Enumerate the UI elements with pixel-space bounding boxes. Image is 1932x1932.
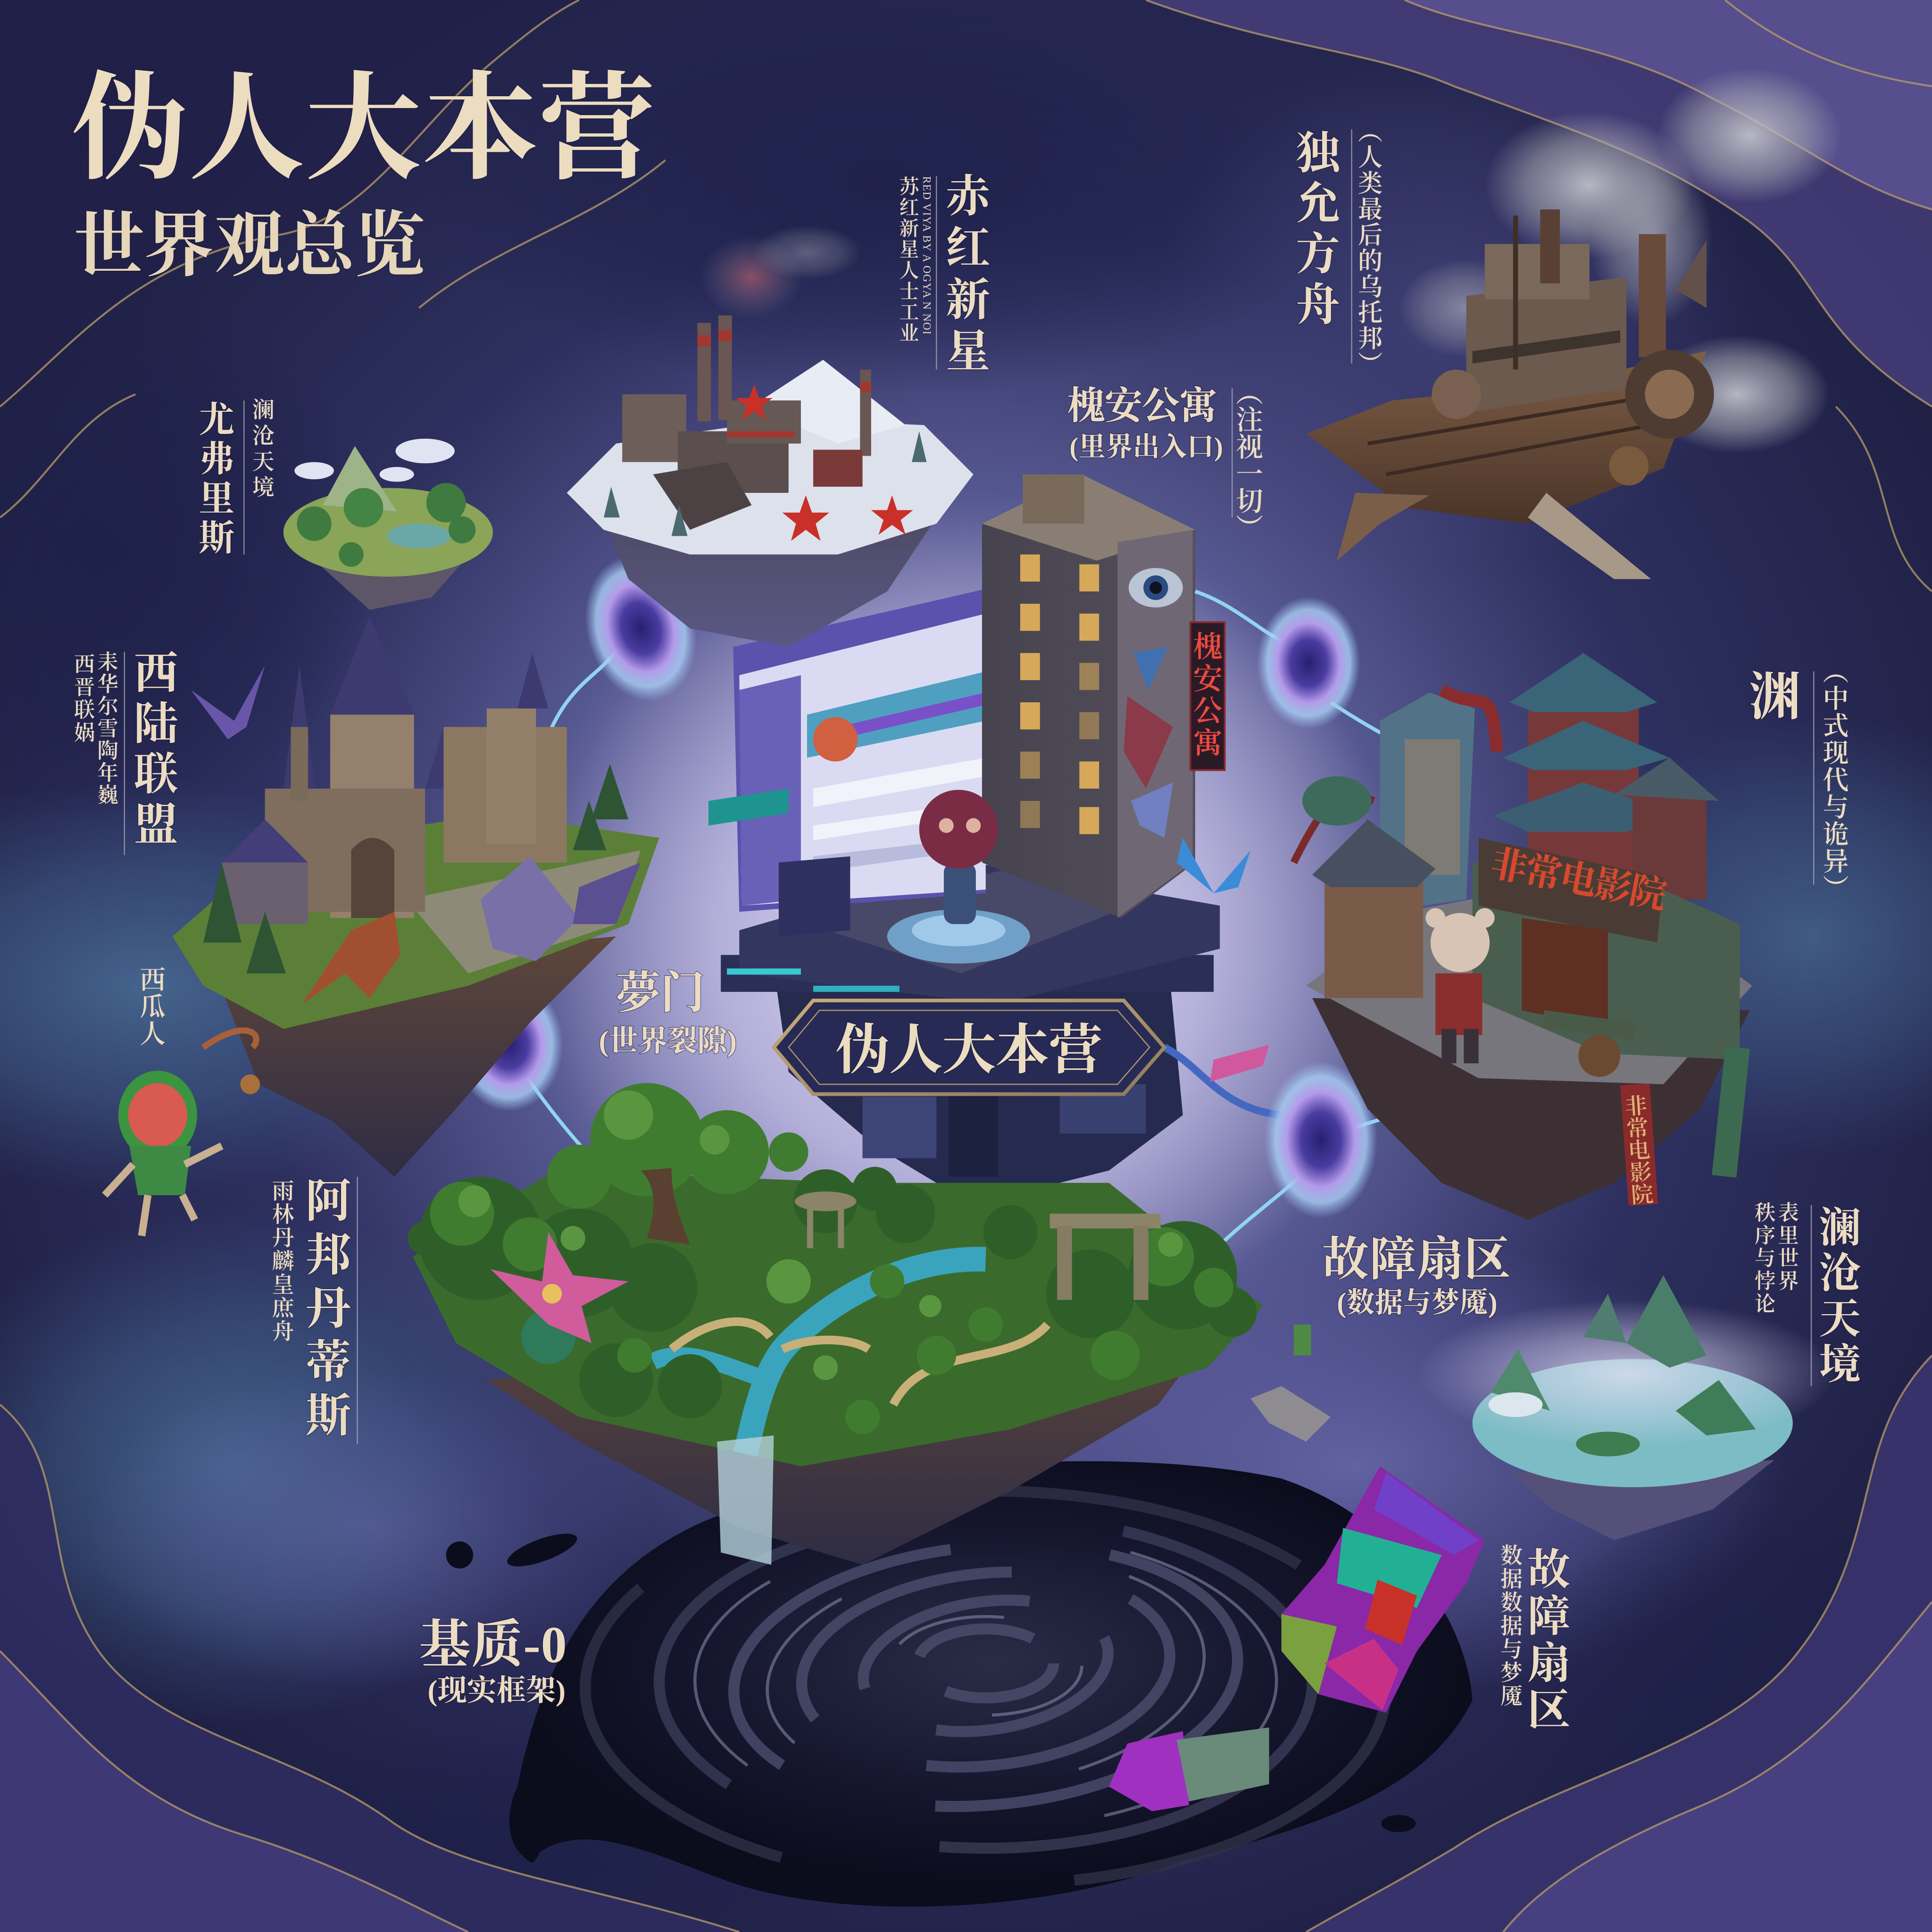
browser window	[708, 589, 986, 936]
hub underside	[776, 986, 1183, 1195]
hub platform	[739, 863, 1220, 1004]
label: Abyss: （中式现代与诡异）	[1819, 658, 1848, 902]
tower: Huai'an apartment	[982, 475, 1195, 918]
hub neon strips	[727, 968, 899, 992]
label: Huai'an apartment: （注视一切）	[1232, 378, 1263, 541]
flower	[491, 1232, 628, 1364]
waterfall	[717, 1435, 774, 1565]
title: 世界观总览	[74, 206, 425, 285]
river	[653, 1259, 986, 1454]
butterfly	[1177, 838, 1250, 893]
label: Fault Sector vertical: 故障扇区	[1521, 1546, 1569, 1733]
island: chinese modern abyss: 非常电影院	[1621, 1093, 1653, 1206]
label: Abondantis	[269, 1177, 358, 1445]
label: Lancang Heavenly Realm: 秩序与悖论	[1751, 1201, 1775, 1316]
label: Red Nova: RED VIYA BY A OGYA N NOI	[920, 176, 933, 335]
label: Watermelon person: 西瓜人	[136, 966, 165, 1047]
island: chinese modern abyss	[1294, 653, 1752, 1220]
label: Western Alliance	[71, 650, 177, 855]
label: Youfulis: 尤弗里斯	[193, 400, 234, 558]
label: Red Nova: 赤红新星	[939, 173, 989, 380]
island: western continent alliance	[173, 616, 659, 1177]
label: Substrate-0: (现实框架)	[427, 1674, 566, 1707]
center badge: 伪人大本营	[835, 1020, 1103, 1080]
title	[72, 65, 656, 285]
label: Huai'an apartment: (里界出入口)	[1069, 433, 1223, 462]
label: Lancang Heavenly Realm	[1751, 1201, 1860, 1387]
label: Fault Sector vertical: 数据数据与梦魇	[1497, 1544, 1523, 1708]
airship: only-permitted ark	[1306, 68, 1842, 579]
label: Youfulis: 澜沧天境	[249, 398, 274, 501]
label: Lancang Heavenly Realm: 澜沧天境	[1813, 1205, 1860, 1387]
label: Fault Sector horizontal: (数据与梦魇)	[1337, 1287, 1498, 1318]
portal: lower right	[1208, 1061, 1454, 1257]
portal: upper right	[1195, 591, 1417, 751]
label: Red Nova	[896, 173, 989, 380]
glitch fragments	[1109, 1466, 1485, 1811]
label: Huai'an apartment	[1067, 378, 1263, 541]
label: Abondantis: 雨林丹麟皇庶舟	[269, 1179, 293, 1343]
label: Red Nova: 苏红新星人士工业	[896, 176, 919, 344]
label: Ark: （人类最后的乌托邦）	[1354, 118, 1382, 377]
label: Dream gate	[599, 969, 737, 1058]
black data swirl: Substrate-0	[446, 1461, 1473, 1907]
label: Substrate-0	[419, 1616, 567, 1707]
ruins	[795, 1191, 1161, 1300]
neon sign: 槐安公寓	[1189, 631, 1222, 759]
title: 伪人大本营	[72, 65, 656, 194]
label: Dream gate: 夢门	[616, 969, 705, 1018]
label: Substrate-0: 基质-0	[419, 1616, 567, 1674]
label: Youfulis	[193, 398, 274, 558]
label: Western Alliance: 耒华尔雪陶年巍	[94, 650, 118, 806]
portal: upper left	[542, 517, 747, 751]
label: Abyss: 渊	[1742, 669, 1800, 721]
data ribbons	[1165, 1045, 1282, 1115]
label: Ark: 独允方舟	[1289, 129, 1340, 332]
island: Youfulis	[283, 439, 493, 610]
center badge	[774, 1000, 1165, 1094]
island: Lancang heavenly realm	[1417, 1275, 1836, 1540]
floating debris	[1250, 1324, 1331, 1441]
portal: lower left	[455, 978, 604, 1171]
label: Dream gate: (世界裂隙)	[599, 1024, 737, 1058]
hub deck	[789, 869, 1146, 974]
hub lower slab	[721, 955, 1214, 992]
central hub: fake-human base	[708, 475, 1282, 1195]
character on disc	[887, 790, 1030, 964]
island: snowy red star industry	[567, 225, 974, 647]
label: Ark	[1289, 118, 1382, 377]
label: Abyss	[1742, 658, 1848, 902]
footpaths	[672, 1322, 1047, 1405]
hub lower panels	[863, 1084, 1146, 1177]
label: Western Alliance: 西晋联娲	[71, 653, 94, 744]
trunk	[641, 1168, 690, 1244]
label: Fault Sector vertical	[1497, 1544, 1569, 1733]
label: Western Alliance: 西陆联盟	[127, 650, 177, 851]
label: Lancang Heavenly Realm: 表里世界	[1775, 1201, 1799, 1292]
label: Fault Sector horizontal: 故障扇区	[1322, 1234, 1511, 1286]
label: Huai'an apartment: 槐安公寓	[1067, 385, 1217, 427]
tree canopy	[408, 1083, 1257, 1434]
label: Abondantis: 阿邦丹蒂斯	[299, 1177, 350, 1445]
label: Fault Sector horizontal	[1322, 1234, 1511, 1318]
island: chinese modern abyss: 非常电影院	[1487, 842, 1670, 917]
portals	[455, 517, 1454, 1257]
watermelon character	[105, 1031, 260, 1236]
island: rainforest Abondantis	[408, 1083, 1263, 1565]
